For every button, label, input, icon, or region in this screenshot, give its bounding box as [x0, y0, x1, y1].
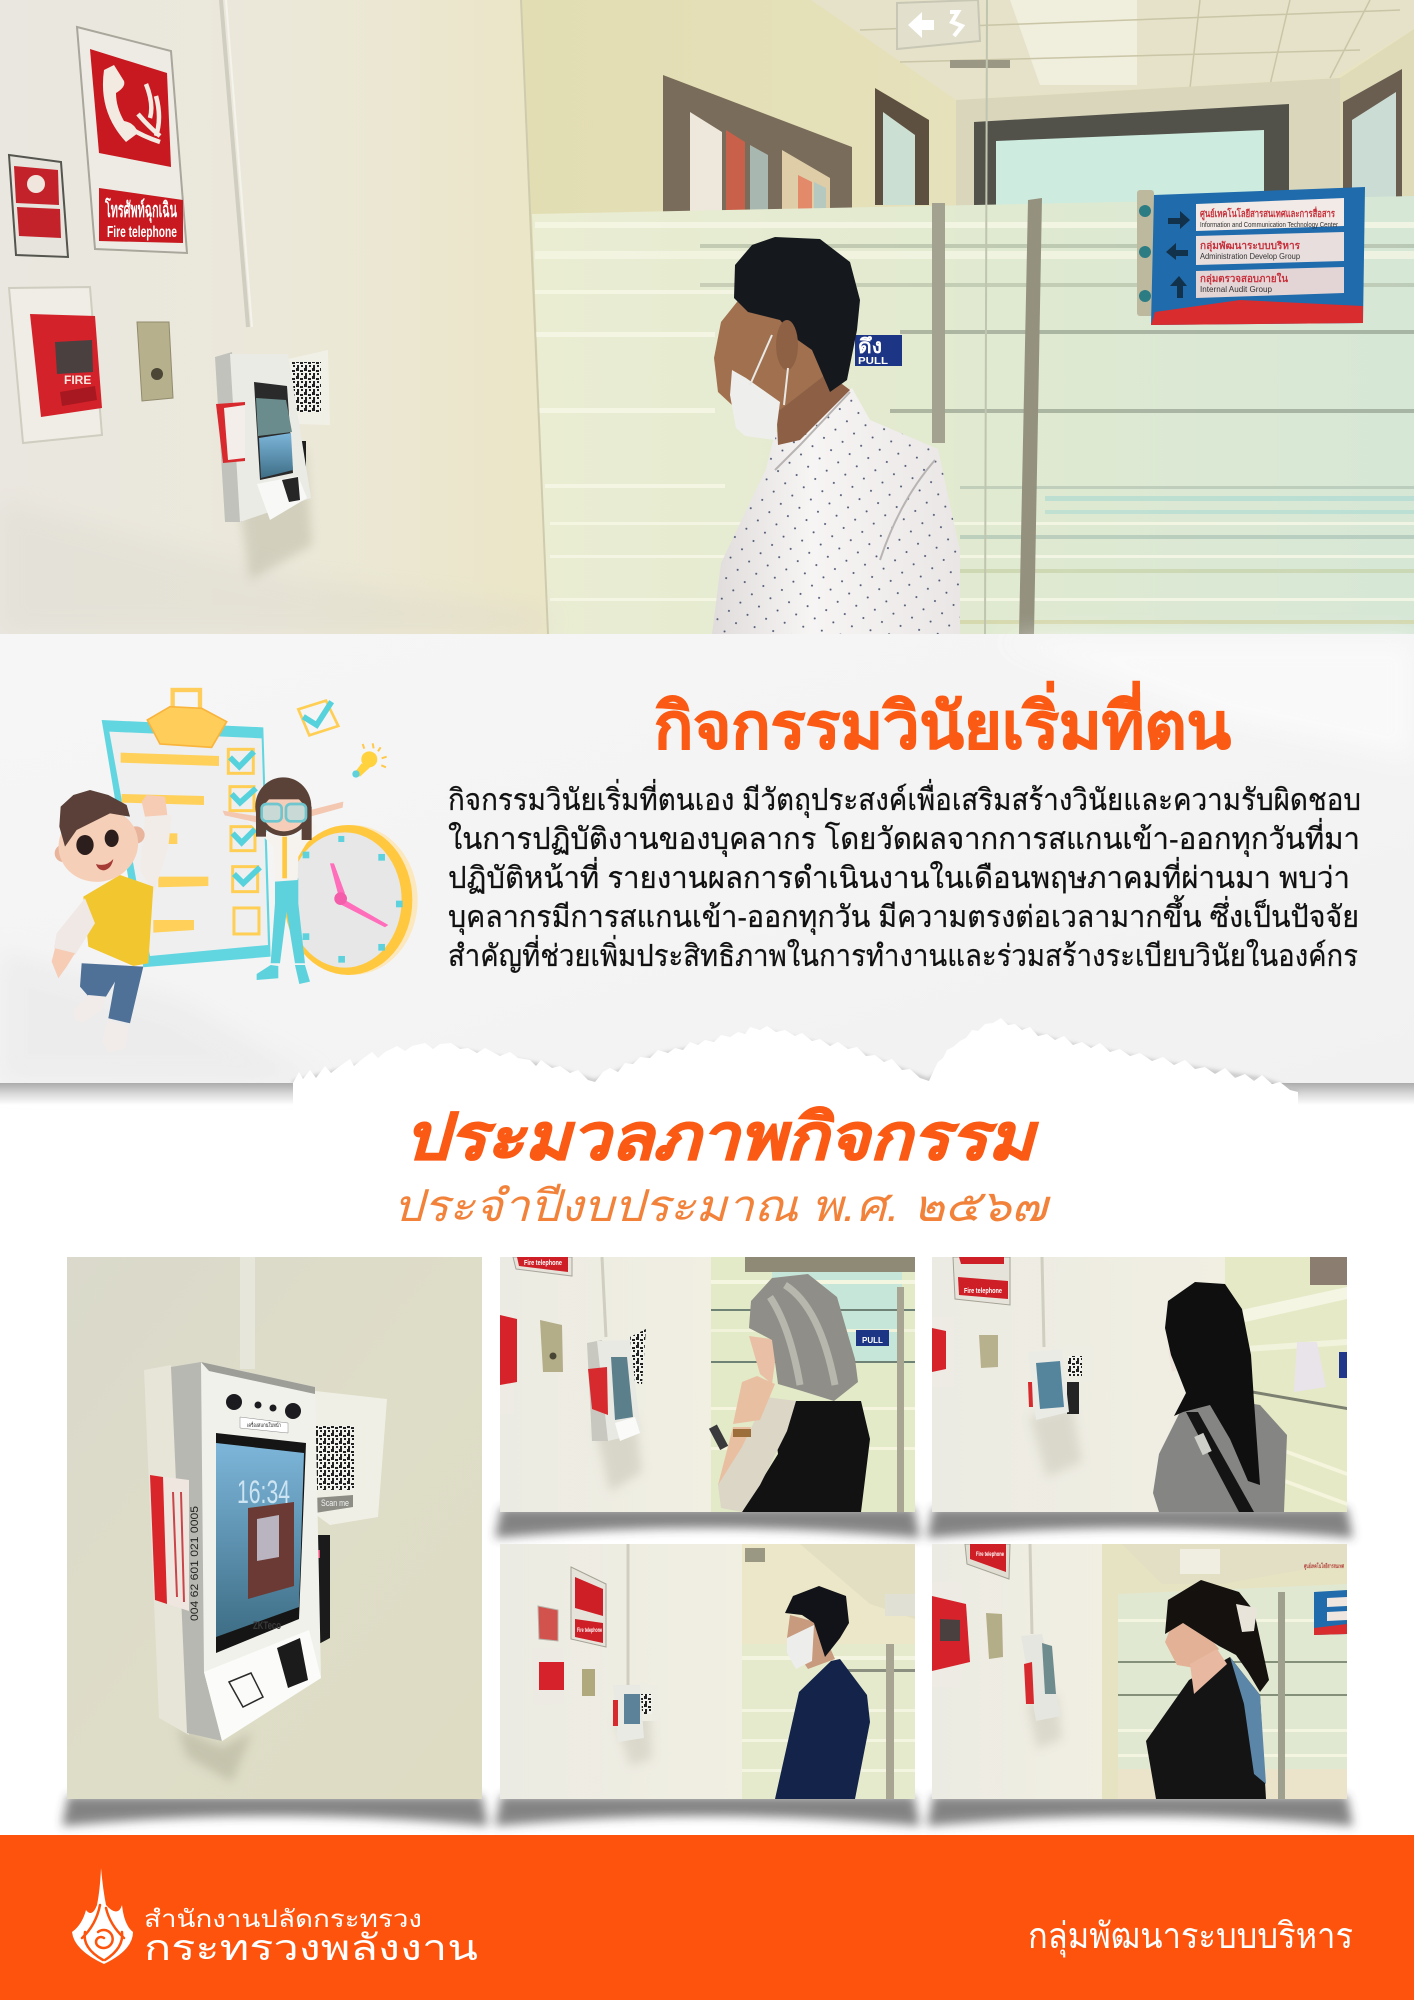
body text paragraph: [448, 779, 1361, 973]
wall items: sign, alarm, plate, device: Fire telephone: [964, 1288, 1002, 1295]
wall items: sign, alarm, plate, device: [932, 1544, 1062, 1749]
woman: [709, 1274, 870, 1512]
device base with card symbol: ZKTeco: [253, 1620, 281, 1632]
fire alarm pull station: FIRE: [64, 373, 91, 387]
girl with glasses: [223, 777, 343, 984]
body line 3: ปฏิบัติหน้าที่ รายงานผลการดำเนินงานในเดือนพฤษภาคมที่ผ่านมา พบว่า: [448, 857, 1350, 895]
back corridor wall: [500, 0, 1414, 634]
paper panel background: [0, 634, 1414, 1083]
clipboard: [102, 690, 271, 967]
pull door label: ดึง: [858, 336, 882, 358]
wall items: sign, alarm, plate, device: Fire telephone: [524, 1260, 562, 1267]
wall shadow under device: [177, 1727, 252, 1782]
pull label: PULL: [862, 1336, 883, 1345]
frosted glass partition: [532, 196, 1414, 634]
ministry flame logo: [72, 1868, 133, 1964]
wall: [500, 1257, 715, 1512]
card reader: [307, 1535, 330, 1646]
small safety notice: [9, 155, 68, 257]
direction sign: กลุ่มตรวจสอบภายใน: [1200, 272, 1288, 285]
glass door area: [711, 1257, 915, 1512]
wall: [932, 1544, 1107, 1799]
torn paper edge: [0, 1018, 1414, 1112]
device screen: [216, 1433, 306, 1653]
fire telephone sign: โทรศัพท์ฉุกเฉิน: [104, 197, 177, 224]
man wearing mask: [712, 237, 960, 634]
fire telephone sign and wall items: Fire telephone: [577, 1628, 602, 1634]
emergency exit sign: [897, 0, 980, 49]
photo: woman with hair clip: [932, 1544, 1347, 1799]
left white wall: [0, 0, 548, 634]
fire telephone sign: [77, 27, 187, 253]
footer bar: [0, 1835, 1414, 2000]
ministry of energy name: กระทรวงพลังงาน: [144, 1927, 478, 1968]
hero photo: staff member at the scanner: [0, 0, 1414, 634]
illustration: checklist and clock characters: [50, 690, 418, 1053]
body line 2: ในการปฏิบัติงานของบุคลากร โดยวัดผลจากการสแกนเข้า-ออกทุกวันที่มา: [448, 818, 1360, 858]
subheading: fiscal year: ประจำปีงบประมาณ พ.ศ. ๒๕๖๗: [393, 1182, 1051, 1231]
direction sign: Administration Develop Group: [1200, 252, 1301, 261]
direction sign: กลุ่มพัฒนาระบบบริหาร: [1200, 240, 1301, 252]
department name: กลุ่มพัฒนาระบบบริหาร: [1028, 1915, 1353, 1958]
pull door label: [855, 335, 902, 367]
boy in yellow vest: [50, 790, 172, 1053]
wall: [67, 1257, 482, 1799]
direction sign: Information and Communication Technology Center: [1200, 222, 1339, 229]
QR code notice: [312, 1391, 387, 1525]
pull door label: PULL: [858, 356, 888, 367]
wall: [932, 1257, 1232, 1512]
device base with card symbol: [204, 1620, 321, 1741]
device body: เครื่องสแกนใบหน้า: [247, 1421, 281, 1429]
QR code notice: Scan me: [321, 1498, 349, 1508]
body line 1: กิจกรรมวินัยเริ่มที่ตนเอง มีวัตถุประสงค์เพื่อเสริมสร้างวินัยและความรับผิดชอบ: [448, 779, 1361, 819]
pull label: [856, 1330, 889, 1346]
wall: [500, 1544, 750, 1799]
body line 4: บุคลากรมีการสแกนเข้า-ออกทุกวัน มีความตรงต่อเวลามากขึ้น ซึ่งเป็นปัจจัย: [448, 895, 1359, 936]
corridor and glass area: [1102, 1544, 1347, 1799]
glass door area: [1225, 1257, 1347, 1512]
photo: man in navy shirt: [500, 1544, 915, 1799]
wall items: sign, alarm, plate, device: [500, 1257, 646, 1492]
device body: [144, 1362, 321, 1741]
heading: activity photo collection: ประมวลภาพกิจกรรม: [404, 1101, 1039, 1173]
device screen: 16:34: [237, 1474, 290, 1510]
fire alarm pull station: [9, 287, 102, 443]
photo shadows: [62, 1508, 1353, 1826]
small checkbox: [298, 701, 338, 735]
wall conduit: [240, 1257, 255, 1369]
direction sign: Internal Audit Group: [1200, 285, 1273, 294]
title: self-discipline activity: กิจกรรมวินัยเริ่มที่ตน: [654, 681, 1231, 762]
clock: [284, 825, 418, 975]
body line 5: สำคัญที่ช่วยเพิ่มประสิทธิภาพในการทำงานและร่วมสร้างระเบียบวินัยในองค์กร: [448, 935, 1358, 973]
corridor and glass area: [742, 1544, 915, 1799]
steel key plate: [137, 322, 173, 401]
photo: woman with grey hair: [500, 1257, 915, 1512]
woman with crossbody strap: [1153, 1282, 1287, 1512]
wall-mounted scanner device: [215, 350, 330, 580]
end of corridor wall and window: [956, 29, 1414, 215]
wall items: sign, alarm, plate, device: Fire telephone: [976, 1552, 1004, 1558]
ceiling tiles: [811, 0, 1414, 100]
woman in black blouse: [1146, 1580, 1269, 1799]
wall items: sign, alarm, plate, device: [932, 1257, 1094, 1477]
red service sticker: [150, 1475, 201, 1621]
fire telephone sign and wall items: [532, 1544, 659, 1766]
ministry office name: สำนักงานปลัดกระทรวง: [144, 1906, 422, 1933]
light bulb: [352, 743, 387, 778]
fire telephone sign: Fire telephone: [107, 224, 177, 241]
photo: woman with long black hair: [932, 1257, 1347, 1512]
door posts: [932, 0, 1042, 634]
man in navy shirt with mask: [775, 1586, 870, 1799]
red service sticker: 004 62 601 021 0005: [189, 1506, 201, 1621]
direction sign: ศูนย์เทคโนโลยีสารสนเทศและการสื่อสาร: [1200, 206, 1335, 221]
direction sign: [1137, 187, 1365, 325]
photo: scanner close-up: [67, 1257, 482, 1799]
notice boards on corridor wall: [663, 75, 929, 215]
